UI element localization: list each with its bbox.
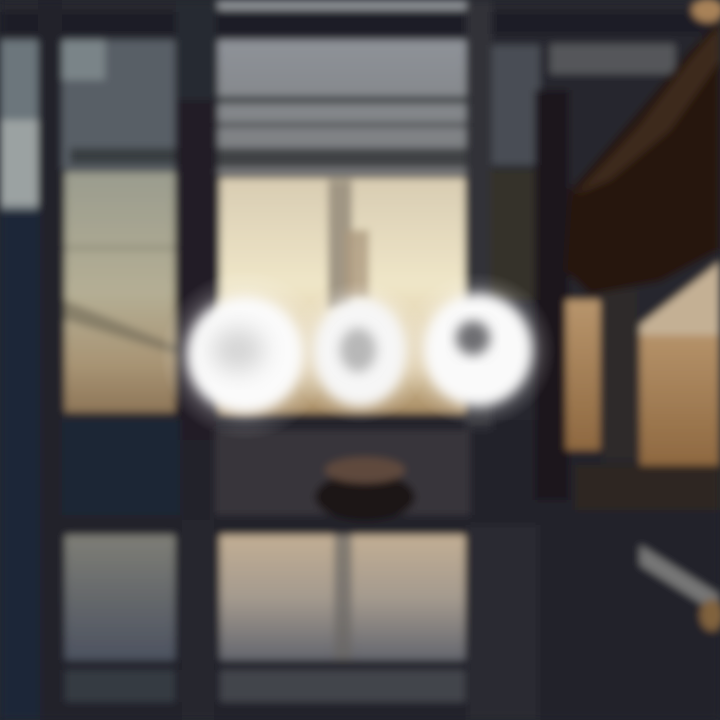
right side: brown overhanging shape — [565, 0, 720, 295]
floor and lower right — [215, 430, 720, 631]
coffee table — [315, 457, 415, 521]
left window: warm light — [65, 172, 175, 412]
right side: tan wall panels — [490, 170, 720, 465]
white round pendant: centre — [288, 280, 432, 424]
skylight horizontal beams — [0, 12, 720, 168]
white round pendant: right — [400, 272, 556, 428]
upper windows: grey skylight band — [0, 0, 675, 210]
floor reflections of windows — [65, 535, 465, 702]
white round pendant: left — [160, 270, 330, 440]
dark columns — [0, 0, 569, 720]
central window: warm light — [220, 178, 465, 413]
